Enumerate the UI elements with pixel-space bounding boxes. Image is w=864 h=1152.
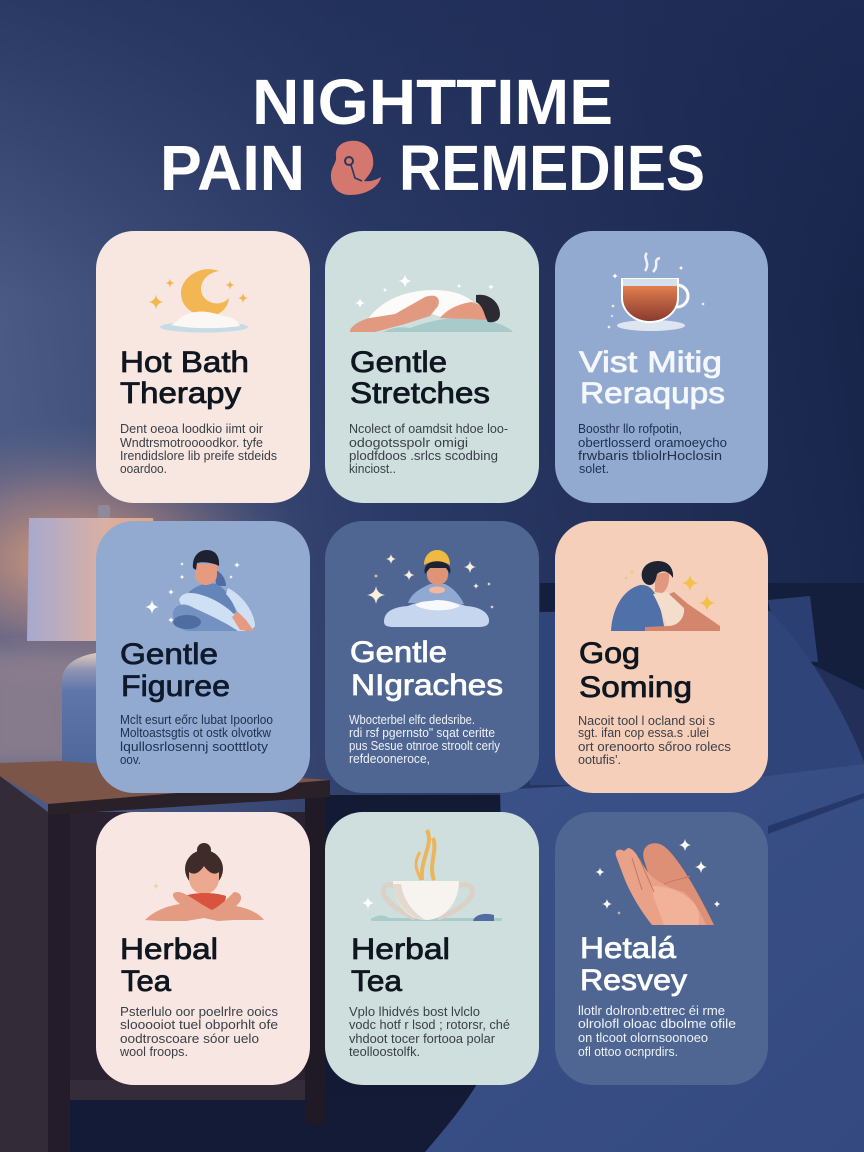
heading: Hetalá [580, 932, 676, 965]
body text: obertlosserd oramoeycho [578, 436, 727, 450]
body text: slooooiot tuel obporhlt ofe [120, 1018, 278, 1032]
body text: Psterlulo oor poelrlre ooics [120, 1005, 278, 1019]
icon: person bending forward [611, 561, 720, 631]
body text: Vplo lhidvés bost lvlclo [349, 1005, 480, 1019]
panel: Vist Mitig Reraqups: Reraqups [580, 377, 725, 410]
panel: Gentle NIgraches [325, 521, 539, 793]
body text: wool froops. [119, 1045, 188, 1059]
panel: Hetalá Resvey: Resvey [580, 964, 687, 997]
panel: Gog Soming [555, 521, 768, 793]
title: REMEDIES [399, 132, 705, 204]
body text: oov. [120, 753, 141, 767]
body text: refdeooneroce, [349, 752, 430, 766]
heading: Gentle [350, 346, 447, 379]
icon: steaming white cup [362, 830, 502, 921]
body text: Dent oeoa loodkio iimt oir [120, 422, 263, 436]
panel: Hetalá Resvey [555, 812, 768, 1085]
icon: person with pillow and stars [367, 550, 494, 627]
panel: Herbal Tea (person): Tea [121, 965, 171, 998]
title [160, 66, 705, 204]
panel: Gog Soming: Soming [579, 671, 692, 704]
heading: Hot Bath [120, 346, 249, 379]
panel: Gentle Figuree [96, 521, 310, 793]
body text: vhdoot tocer fortooa polar [349, 1032, 495, 1046]
panel: Herbal Tea (person) [96, 812, 310, 1085]
icon: pink spiral [331, 141, 381, 195]
panel: Vist Mitig Reraqups [555, 231, 768, 503]
body text: llotlr dolronb:ettrec éi rme [578, 1004, 725, 1018]
front pillow [530, 610, 864, 785]
body text: vodc hotf r lsod ; rotorsr, ché [349, 1018, 510, 1032]
lamp [27, 505, 170, 783]
panel: Hot Bath Therapy [96, 231, 310, 503]
body text: odogotsspolr omigi [349, 436, 468, 450]
body text: sgt. ifan cop essa.s .ulei [578, 726, 709, 740]
body text: rdi rsf pgernsto" sqat ceritte [349, 726, 495, 740]
icon: moon on cloud [148, 269, 248, 332]
body text: pus Sesue otnroe stroolt cerly [349, 739, 501, 753]
body text: ofl ottoo ocnprdirs. [578, 1045, 678, 1059]
body text: on tlcoot olornsoonoeo [578, 1031, 708, 1045]
panel: Gentle Stretches: Stretches [350, 377, 490, 410]
floor [0, 1095, 864, 1152]
body text: Wbocterbel elfc dedsribe. [349, 713, 475, 727]
body text [578, 1004, 736, 1059]
body text: ooardoo. [120, 462, 167, 476]
body text: ort orenoorto sőroo rolecs [578, 740, 731, 754]
body text: Irendidslore lib preife stdeids [120, 449, 277, 463]
nightstand [0, 761, 330, 1152]
title: PAIN [160, 132, 305, 204]
body text: Moltoastsgtis ot ostk olvotkw [120, 726, 272, 740]
panel: Hot Bath Therapy: Therapy [120, 377, 241, 410]
icon: open hand [596, 839, 720, 925]
duvet [425, 764, 864, 1152]
icon: cup of tea [607, 253, 705, 331]
body text: olrolofl oloac dbolme ofile [578, 1017, 736, 1031]
heading: Vist Mitig [579, 346, 722, 379]
headboard [540, 583, 864, 783]
panel: Gentle Stretches [325, 231, 539, 503]
back pillow [768, 596, 818, 662]
panel: Gentle NIgraches: NIgraches [351, 669, 503, 702]
body text: solet. [579, 462, 609, 476]
panel: Gentle Figuree: Figuree [121, 670, 230, 703]
side pillow [807, 662, 864, 772]
panel: Herbal Tea (cup) [325, 812, 539, 1085]
body text [578, 422, 727, 476]
body text [349, 422, 508, 476]
heading: Herbal [351, 933, 450, 966]
body text [120, 713, 273, 767]
body text: kinciost.. [349, 462, 396, 476]
body text: Wndtrsmotroooodkor. tyfe [120, 436, 263, 450]
icon: person hugging pillow [145, 550, 255, 631]
body text [349, 1005, 510, 1059]
body text [119, 1005, 278, 1059]
body text: Nacoit tool l ocland soi s [578, 714, 715, 728]
body text [578, 714, 731, 767]
body text: plodfdoos .srlcs scodbing [349, 449, 498, 463]
body text: oodtroscoare sóor uelo [120, 1032, 259, 1046]
panel: Herbal Tea (cup): Tea [351, 965, 402, 998]
duvet fold [768, 793, 864, 834]
body text: Mclt esurt eőrc lubat Ipoorloo [120, 713, 273, 727]
body text: Ncolect of oamdsit hdoe loo- [349, 422, 508, 436]
heading: Gentle [120, 638, 218, 671]
body text: teolloostolfk. [349, 1045, 420, 1059]
body text: lqullosrlosennj sootttloty [120, 740, 269, 754]
body text [120, 422, 277, 476]
body text: frwbaris tbliolrHoclosin [578, 449, 722, 463]
heading: Herbal [120, 933, 218, 966]
heading: Gentle [350, 636, 447, 669]
body text: ootufis'. [578, 753, 621, 767]
body text [349, 713, 501, 766]
title: NIGHTTIME [252, 66, 613, 138]
body text: Boosthr llo rofpotin, [578, 422, 682, 436]
heading: Gog [579, 637, 640, 670]
icon: person lying stretched [350, 274, 513, 332]
icon: person with crossed arms [145, 843, 264, 921]
